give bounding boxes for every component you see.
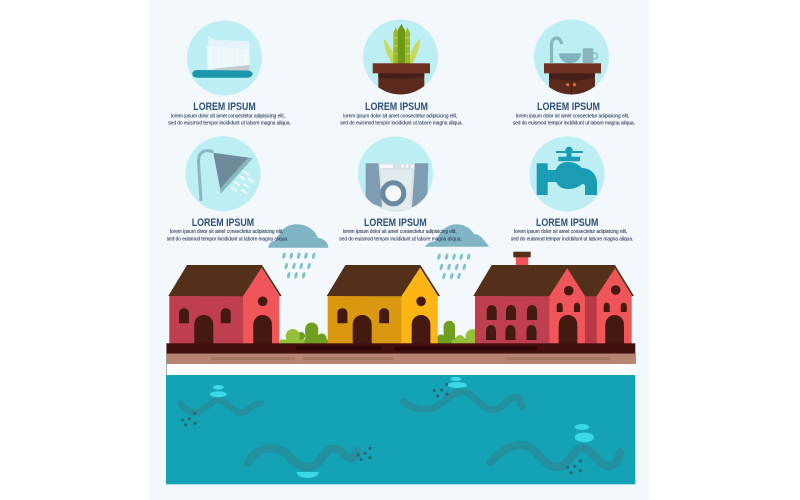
doors and windows (486, 285, 627, 344)
heading: LOREM IPSUM (192, 217, 254, 229)
rain left (282, 252, 316, 279)
house: large red (473, 252, 634, 344)
specks (566, 459, 582, 474)
background panel (149, 0, 649, 500)
icon: shower head (186, 136, 260, 211)
ground layers (166, 343, 636, 375)
card: plant (340, 20, 463, 127)
body text: lorem ipsum dolor sit amet consectetur adipisicing elit, (516, 114, 629, 120)
specks (433, 383, 449, 398)
specks (356, 447, 372, 461)
pipe worm 2 (248, 447, 372, 478)
body text (511, 229, 633, 242)
body text: sed do euismod tempor incididunt ut labore magna aliqua. (340, 121, 463, 127)
bush left (280, 322, 330, 344)
roof (168, 265, 282, 296)
bubbles (575, 424, 594, 442)
card: tap (511, 136, 633, 242)
bubbles (297, 472, 319, 478)
pipe worm 3 (403, 377, 522, 410)
heading: LOREM IPSUM (537, 101, 600, 113)
icon: water tap (530, 136, 604, 212)
pipe worm 4 (491, 424, 620, 474)
icon: potted plant (363, 20, 438, 98)
body text (340, 114, 463, 127)
heading: LOREM IPSUM (364, 217, 427, 229)
roof (473, 265, 634, 296)
house: yellow (327, 265, 440, 344)
doors and windows (179, 296, 272, 344)
heading: LOREM IPSUM (536, 217, 599, 229)
heading: LOREM IPSUM (365, 101, 428, 113)
bush right (436, 321, 483, 344)
body text: sed do euismod tempor incididunt ut labore magna aliqua. (168, 121, 291, 127)
pipe worm 1 (180, 385, 261, 427)
water layer (166, 375, 635, 484)
cloud left (268, 224, 328, 248)
chimney (513, 252, 531, 274)
specks (181, 412, 197, 427)
rain right (437, 253, 471, 280)
card: shower (167, 136, 288, 242)
body text: lorem ipsum dolor sit amet consectetur adipisicing elit, (170, 229, 283, 235)
cloud right (425, 224, 489, 247)
body text (339, 229, 462, 242)
house: red (168, 265, 282, 344)
body text: lorem ipsum dolor sit amet consectetur adipisicing elit, (514, 229, 627, 235)
heading: LOREM IPSUM (193, 101, 256, 113)
bubbles (210, 385, 227, 397)
card: toothbrush (168, 20, 291, 127)
card: sink (513, 20, 635, 127)
roof (327, 265, 440, 296)
body text: lorem ipsum dolor sit amet consectetur adipisicing elit, (171, 114, 285, 120)
body text (513, 114, 635, 127)
body text: sed do euismod tempor incididunt ut labore magna aliqua. (167, 236, 288, 242)
icon: washing machine (358, 136, 433, 213)
bubbles (448, 377, 467, 388)
body text: sed do euismod tempor incididunt ut labore magna aliqua. (339, 236, 462, 242)
body text (167, 229, 288, 242)
body text: sed do euismod tempor incididunt ut labore magna aliqua. (511, 236, 633, 242)
body text: lorem ipsum dolor sit amet consectetur adipisicing elit, (343, 229, 457, 235)
doors and windows (337, 296, 430, 344)
body text: lorem ipsum dolor sit amet consectetur adipisicing elit, (343, 114, 457, 120)
icon: sink and cup (534, 20, 609, 98)
body text (168, 114, 291, 127)
card: washing machine (339, 136, 462, 242)
body text: sed do euismod tempor incididunt ut labore magna aliqua. (513, 121, 635, 127)
icon: toothbrush (187, 20, 262, 96)
